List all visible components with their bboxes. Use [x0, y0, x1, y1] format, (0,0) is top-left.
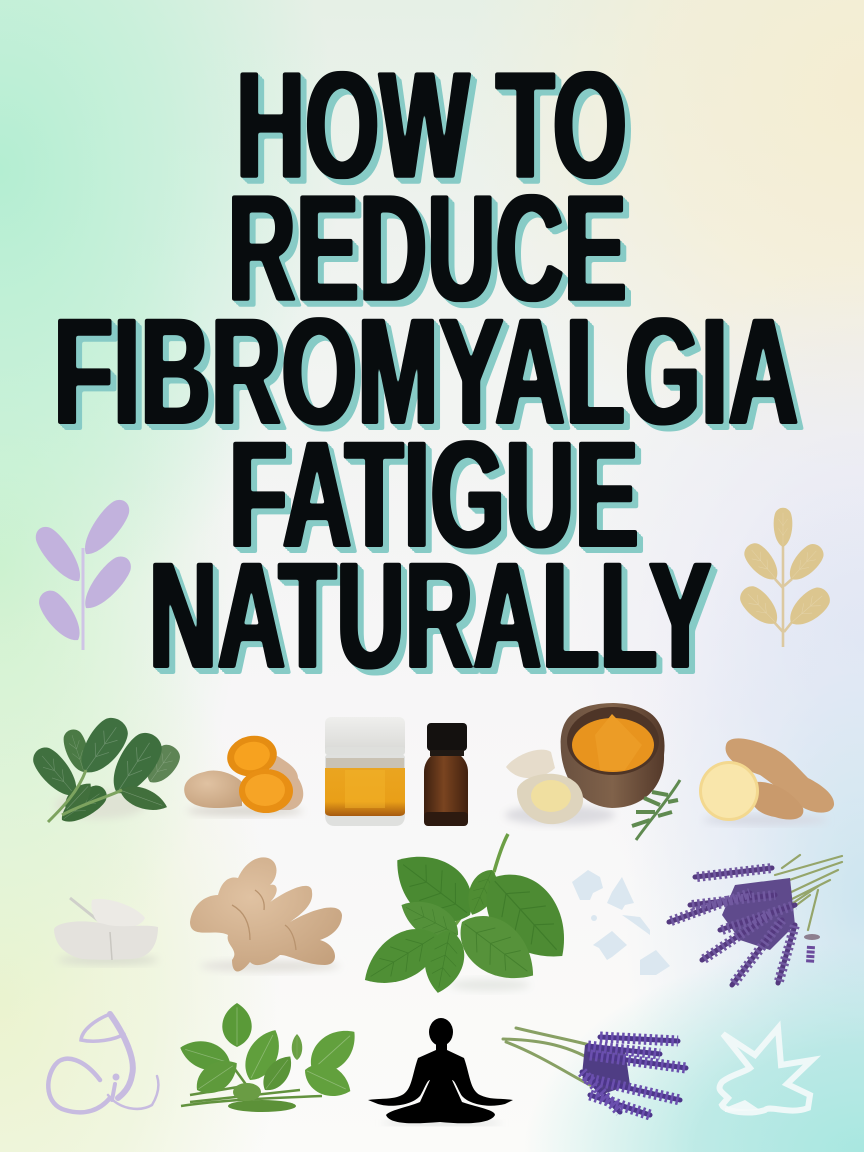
- icon: white mortar bowls: [54, 898, 158, 965]
- icon: green herb sprig: [176, 1003, 365, 1112]
- icon: white burst outline: [720, 1028, 812, 1112]
- icon: brown dropper bottle: [424, 723, 468, 826]
- title: REDUCE: [228, 163, 627, 334]
- icon: pale blue stars: [572, 870, 670, 975]
- icon: amber oil jar: [325, 717, 405, 826]
- icon: meditation silhouette: [368, 1018, 513, 1125]
- title: [54, 40, 798, 701]
- icon: tan leaf sprig: [735, 508, 835, 647]
- icon: lavender bunch large: [669, 855, 842, 985]
- icon: ginger root: [190, 857, 342, 972]
- icon: dark green sprig: [27, 711, 185, 830]
- icon: turmeric root: [184, 731, 303, 816]
- icon: lemon and ginger: [699, 738, 834, 825]
- title: FATIGUE: [229, 409, 639, 580]
- icon: lilac swirl: [48, 1014, 158, 1112]
- icon: lavender bunch small: [503, 1028, 686, 1115]
- icon: green mint leaves: [353, 834, 586, 999]
- title: HOW TO: [236, 40, 627, 211]
- icon: lilac leaf sprig: [30, 494, 137, 650]
- icon: bowl of turmeric powder: [505, 703, 680, 840]
